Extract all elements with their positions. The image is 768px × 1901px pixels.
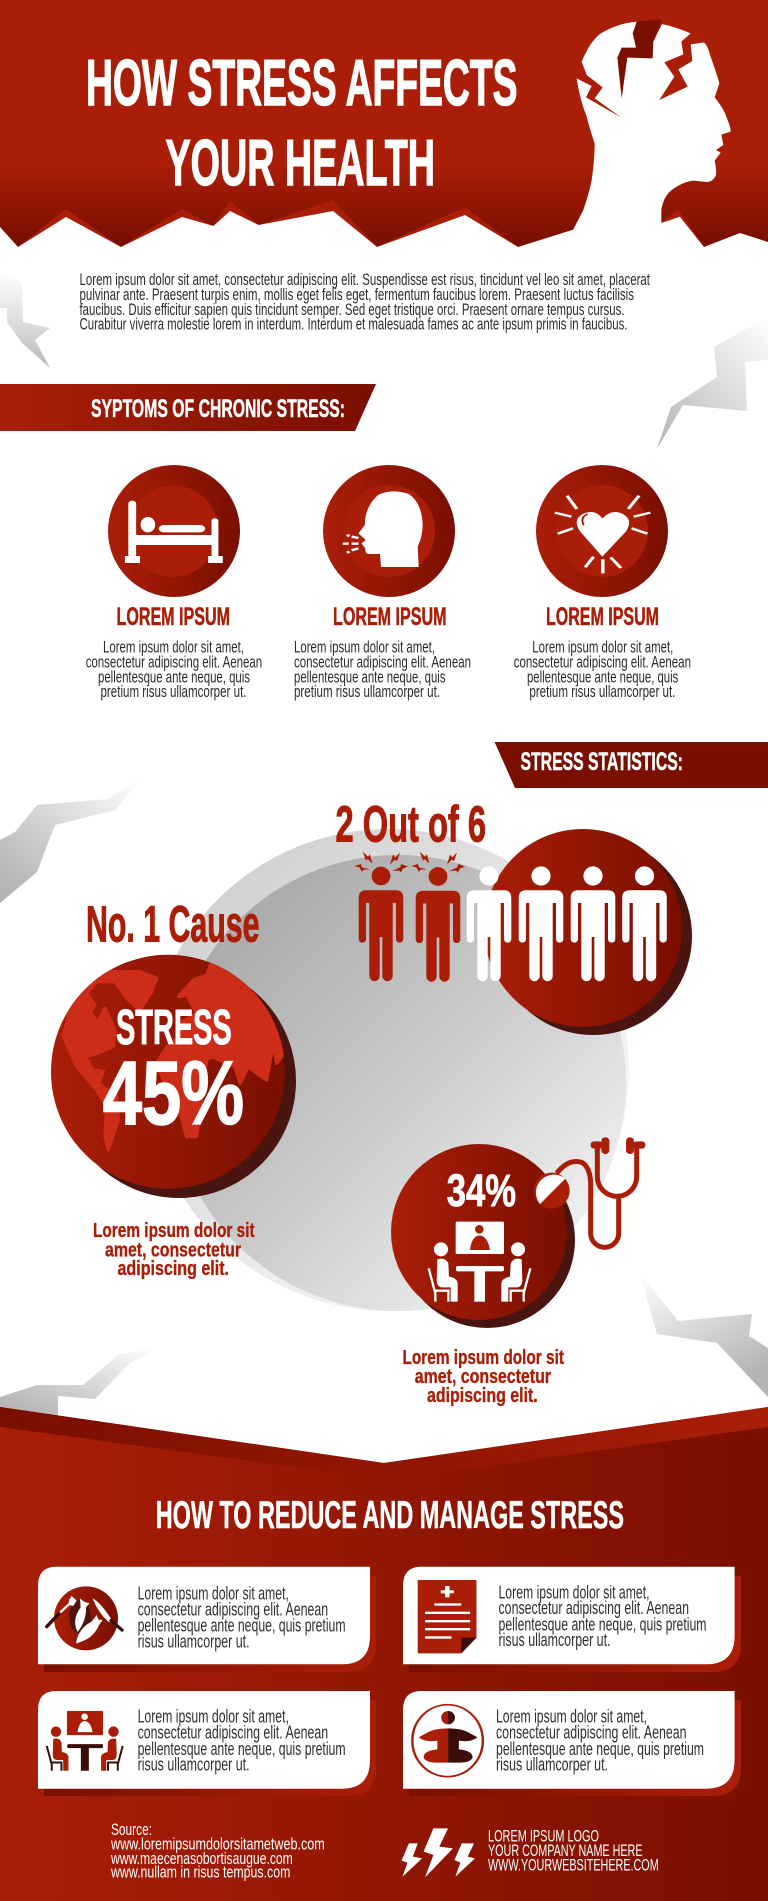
card text: risus ullamcorper ut. [496, 1755, 608, 1775]
symptom text: pretium risus ullamcorper ut. [529, 682, 675, 701]
torn edge highlight [18, 200, 704, 262]
company info [488, 1827, 659, 1875]
caption: adipiscing elit. [118, 1258, 229, 1280]
icon: heart [536, 465, 668, 597]
symptom text: pretium risus ullamcorper ut. [100, 682, 246, 701]
grey crack left middle [0, 778, 142, 903]
globe disc [51, 955, 296, 1198]
panel: symptom sleep [86, 465, 262, 701]
card: talk [38, 1691, 376, 1796]
card text [138, 1706, 346, 1775]
symptom heading: LOREM IPSUM [333, 603, 446, 631]
source list [110, 1820, 325, 1881]
card text: Lorem ipsum dolor sit amet, [138, 1706, 289, 1726]
stat number: 34% [447, 1165, 516, 1216]
card: diet [38, 1567, 376, 1672]
symptom text [514, 638, 691, 701]
icon: lightning logo [402, 1828, 475, 1877]
red disc [391, 1144, 575, 1328]
torn paper edge [0, 211, 768, 300]
title [86, 46, 518, 199]
heading: No. 1 Cause [86, 896, 260, 953]
card text [138, 1583, 346, 1651]
panel: symptom breath [294, 465, 471, 701]
card text: Lorem ipsum dolor sit amet, [496, 1706, 647, 1726]
title: YOUR HEALTH [166, 126, 435, 199]
caption: adipiscing elit. [427, 1385, 538, 1407]
card: medical [403, 1567, 741, 1672]
symptom text: pellentesque ante neque, quis [294, 668, 446, 687]
panel: symptom heart [514, 465, 691, 701]
source list: www.nullam in risus tempus.com [110, 1862, 290, 1881]
symptom text: pretium risus ullamcorper ut. [294, 682, 440, 701]
card text [496, 1706, 704, 1775]
symptom heading: LOREM IPSUM [116, 603, 230, 631]
caption: amet, consectetur [105, 1240, 241, 1262]
grey crack right top [657, 317, 768, 449]
source list: Source: [111, 1820, 152, 1839]
icon: meditation figure [412, 1705, 483, 1777]
company info: LOREM IPSUM LOGO [488, 1827, 599, 1846]
symptom text: Lorem ipsum dolor sit amet, [103, 638, 244, 657]
grey crack left top [0, 272, 50, 368]
symptom text: consectetur adipiscing elit. Aenean [514, 653, 691, 672]
stat: 34 percent [391, 1137, 645, 1407]
icon: cracked head silhouette [573, 19, 731, 243]
panel: reduce stress background [0, 1407, 768, 1901]
icon: head breathing [323, 465, 455, 597]
card text: consectetur adipiscing elit. Aenean [138, 1599, 328, 1619]
header background [0, 0, 768, 252]
symptom text: pellentesque ante neque, quis [98, 668, 250, 687]
card text [498, 1582, 706, 1650]
icon: meeting [429, 1222, 530, 1302]
card text: pellentesque ante neque, quis pretium [138, 1616, 346, 1636]
company info: YOUR COMPANY NAME HERE [488, 1841, 642, 1860]
card text: consectetur adipiscing elit. Aenean [496, 1723, 686, 1743]
intro paragraph [80, 270, 650, 334]
card text: pellentesque ante neque, quis pretium [138, 1739, 346, 1759]
source list: www.maecenasobortisaugue.com [110, 1849, 293, 1868]
caption: Lorem ipsum dolor sit [93, 1220, 255, 1242]
banner: statistics heading [495, 742, 768, 788]
card text: risus ullamcorper ut. [138, 1755, 250, 1775]
company info: WWW.YOURWEBSITEHERE.COM [488, 1856, 659, 1875]
card text: risus ullamcorper ut. [498, 1630, 610, 1650]
icon: stethoscope [557, 1137, 645, 1247]
caption [93, 1220, 255, 1280]
large grey backdrop circle [147, 829, 629, 1311]
symptom text [294, 638, 471, 701]
icon: meeting [47, 1711, 123, 1771]
symptom text: pellentesque ante neque, quis [527, 668, 678, 687]
banner: symptoms heading: SYPTOMS OF CHRONIC STRESS: [91, 395, 345, 423]
stress label: STRESS [116, 1001, 232, 1055]
symptom text [86, 638, 262, 701]
stat number: 45% [103, 1044, 244, 1144]
card text: consectetur adipiscing elit. Aenean [138, 1723, 328, 1743]
symptom text: Lorem ipsum dolor sit amet, [532, 638, 673, 657]
caption [402, 1347, 564, 1407]
card text: risus ullamcorper ut. [138, 1631, 250, 1651]
symptom text: consectetur adipiscing elit. Aenean [294, 653, 471, 672]
symptom text: Lorem ipsum dolor sit amet, [294, 638, 435, 657]
people pictogram [354, 852, 667, 982]
symptom heading: LOREM IPSUM [546, 603, 659, 631]
symptom text: consectetur adipiscing elit. Aenean [86, 653, 262, 672]
icon: plate and cutlery [47, 1586, 122, 1650]
card: meditation [403, 1691, 741, 1796]
source list: www.loremipsumdolorsitametweb.com [110, 1834, 325, 1853]
stat: 2 out of 6 [336, 796, 692, 1035]
caption: amet, consectetur [415, 1366, 551, 1388]
stat: no 1 cause [51, 896, 296, 1280]
stat number: 2 Out of 6 [336, 796, 486, 853]
stethoscope chest piece [534, 1173, 570, 1209]
caption: Lorem ipsum dolor sit [402, 1347, 564, 1369]
icon: bed [108, 465, 240, 597]
banner: symptoms heading [0, 384, 376, 431]
card text: Lorem ipsum dolor sit amet, [498, 1582, 650, 1602]
grey crack left bottom [0, 1348, 157, 1417]
card text: Lorem ipsum dolor sit amet, [138, 1583, 289, 1603]
card text: consectetur adipiscing elit. Aenean [498, 1598, 689, 1618]
icon: medical document [418, 1580, 476, 1653]
grey crack right bottom [639, 1272, 768, 1397]
red disc [484, 829, 692, 1035]
